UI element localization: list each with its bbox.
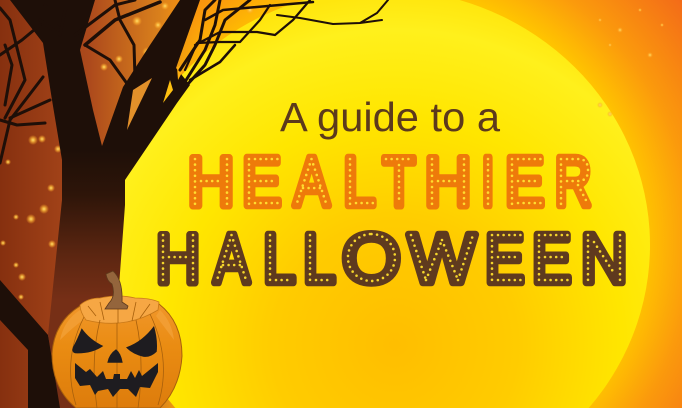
heading line 1: H	[424, 142, 472, 220]
title	[156, 94, 628, 297]
heading line 2: E	[485, 219, 524, 297]
heading line 2: E	[532, 219, 571, 297]
tree trunk and main limbs	[10, 0, 200, 408]
pumpkin mouth	[75, 363, 158, 397]
pumpkin nose	[107, 349, 123, 363]
heading line 2: A	[214, 219, 250, 297]
pumpkin stem	[105, 271, 128, 309]
branches	[0, 0, 388, 163]
heading line 1: T	[383, 142, 415, 220]
pumpkin ribs	[71, 298, 163, 408]
heading line 2: O	[342, 219, 401, 297]
heading line 1	[187, 142, 592, 220]
heading line 2	[156, 219, 628, 297]
lower left limb	[0, 280, 62, 408]
heading line 1: A	[294, 142, 330, 220]
pumpkin eye left	[72, 328, 103, 353]
heading line 2: L	[263, 219, 296, 297]
heading line 1: L	[343, 142, 376, 220]
pumpkin body	[52, 302, 182, 408]
full moon	[114, 0, 650, 408]
heading line 2: W	[408, 219, 476, 297]
pumpkin highlight	[60, 310, 174, 340]
tree silhouette	[0, 0, 388, 408]
heading line 2: L	[303, 219, 336, 297]
subtitle: A guide to a	[280, 94, 500, 140]
heading line 1: E	[242, 142, 281, 220]
heading line 2: H	[156, 219, 200, 297]
gaps in the limb	[127, 63, 187, 130]
heading line 1: E	[505, 142, 544, 220]
pumpkin eye right	[126, 326, 157, 357]
sparkles	[0, 2, 664, 300]
pumpkin	[52, 271, 182, 408]
heading line 2: N	[581, 219, 628, 297]
heading line 1: I	[481, 142, 494, 220]
pumpkin lid	[80, 296, 159, 323]
heading line 1: R	[555, 142, 592, 220]
heading line 1: H	[187, 142, 235, 220]
